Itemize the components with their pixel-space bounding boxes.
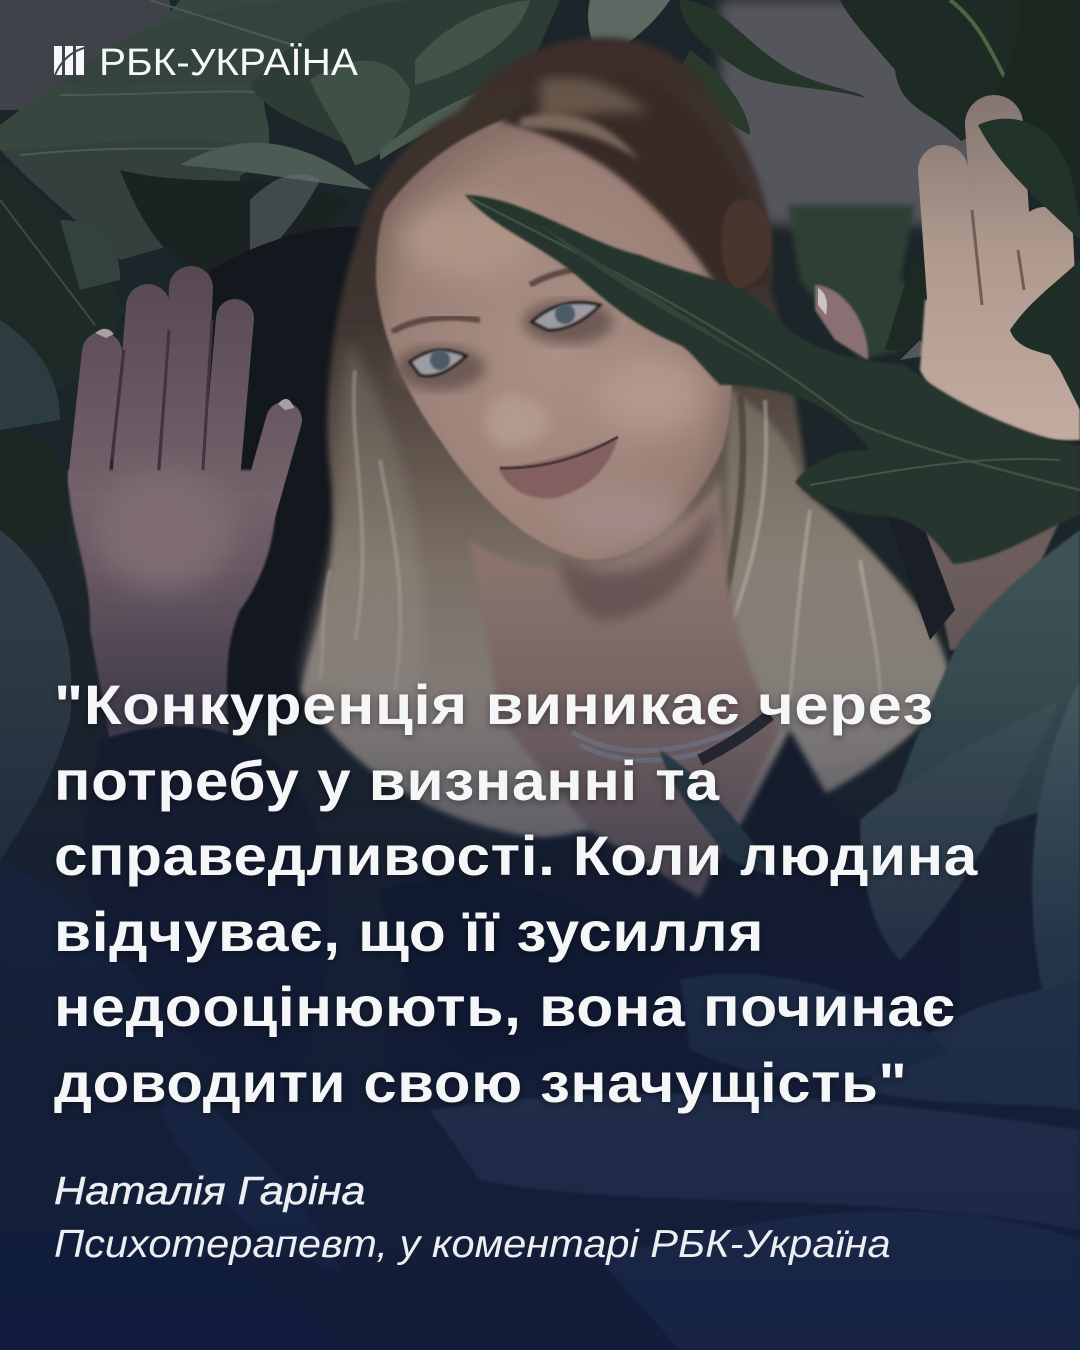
nose	[486, 395, 549, 447]
quote: недооцінюють, вона починає	[54, 975, 956, 1038]
big leaf across the face	[465, 195, 1080, 564]
finger nails	[95, 329, 294, 410]
thumb	[815, 285, 868, 360]
right shoulder and forearm	[910, 510, 1060, 650]
logo icon	[54, 46, 84, 75]
eyes	[410, 350, 466, 376]
logo text: РБК-УКРАЇНА	[99, 42, 358, 84]
author attribution: Психотерапевт, у коментарі РБК-Україна	[54, 1223, 891, 1266]
black top	[380, 730, 960, 1080]
right side leaves over hand	[1010, 260, 1080, 410]
quote: справедливості. Коли людина	[54, 824, 978, 887]
quote	[54, 673, 978, 1117]
right hair blond	[727, 390, 950, 767]
quote: відчуває, що її зусилля	[54, 900, 764, 963]
author attribution	[54, 1170, 891, 1266]
wall	[720, 0, 980, 225]
brows	[392, 318, 480, 332]
necklace	[572, 720, 762, 760]
lips	[498, 437, 618, 498]
lower right foliage	[0, 530, 1080, 1350]
quote: потребу у визнанні та	[54, 749, 720, 812]
left hair lights	[300, 340, 424, 710]
eye shadows	[395, 346, 485, 390]
foliage: top left	[0, 0, 560, 860]
ear	[721, 199, 772, 290]
logo	[54, 42, 358, 84]
neck and chest	[470, 480, 780, 900]
foliage: top right	[588, 0, 1080, 360]
quote: доводити свою значущість"	[54, 1051, 907, 1114]
quote: "Конкуренція виникає через	[54, 673, 934, 736]
author attribution: Наталія Гаріна	[54, 1170, 365, 1213]
hair back	[300, 37, 950, 846]
face	[376, 76, 772, 560]
hair over forehead	[500, 76, 770, 300]
left hand	[68, 288, 294, 740]
dark gap behind left hand	[190, 226, 400, 720]
right hand	[815, 124, 1080, 440]
